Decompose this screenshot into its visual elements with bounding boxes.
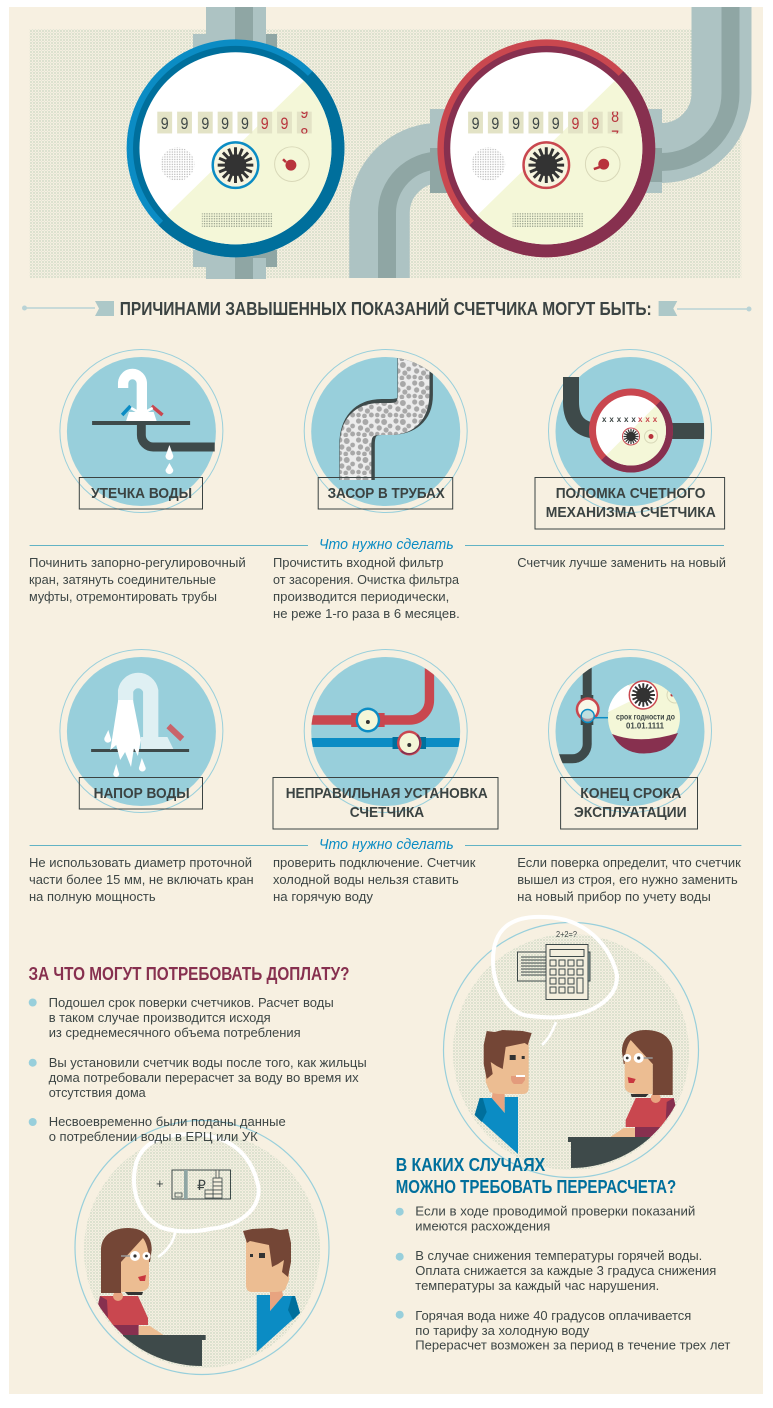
pipe: right curved pipe of red meter <box>640 7 730 193</box>
small meter with magnifier <box>576 695 609 725</box>
list: surcharge reasons: Вы установили счетчик воды после того, как жильцы <box>49 1055 367 1070</box>
meter digits: 9 <box>532 114 540 133</box>
list: recalculation cases: по тарифу за холодную воду <box>415 1323 590 1338</box>
list: recalculation cases: температуры за каждый час нарушения. <box>415 1278 659 1293</box>
subheading: what to do, row one: Что нужно сделать <box>319 536 454 553</box>
central dial <box>524 142 569 188</box>
formula: 2+2=? <box>556 930 577 939</box>
text block: pressure advice: Не использовать диаметр проточной <box>29 855 252 870</box>
panel: broken meter icon: xxx <box>638 415 660 424</box>
meter digits: 8 <box>611 107 619 126</box>
label: broken mechanism: МЕХАНИЗМА СЧЕТЧИКА <box>546 504 716 521</box>
small blue meter <box>351 708 385 732</box>
heading: recalculation: В КАКИХ СЛУЧАЯХ <box>396 1155 545 1175</box>
illustration: surcharge conversation <box>75 1120 329 1374</box>
speech bubble <box>134 1134 259 1257</box>
meter digits <box>157 112 312 134</box>
meter digits: 9 <box>241 114 249 133</box>
heading: surcharge: ЗА ЧТО МОГУТ ПОТРЕБОВАТЬ ДОПЛАТУ? <box>28 964 350 984</box>
list: recalculation cases: Если в ходе проводимой проверки показаний <box>415 1204 695 1219</box>
red meter <box>437 39 655 257</box>
text block: expiry advice <box>517 855 741 904</box>
text block: clog advice: от засорения. Очистка фильтра <box>273 572 460 587</box>
speech bubble <box>493 917 617 1045</box>
text block: leak advice <box>29 555 246 604</box>
label: end of service life: КОНЕЦ СРОКА <box>580 785 681 802</box>
text block: broken meter advice: Счетчик лучше заменить на новый <box>517 555 726 570</box>
woman and desk, left panel <box>98 1228 206 1372</box>
heading: recalculation <box>396 1155 676 1197</box>
receipt with ruble coins: + <box>156 1176 164 1191</box>
section heading with ribbons: ПРИЧИНАМИ ЗАВЫШЕННЫХ ПОКАЗАНИЙ СЧЕТЧИКА МОГУТ БЫТЬ: <box>120 298 652 319</box>
meter digits: 9 <box>261 114 269 133</box>
dotted plate <box>513 213 583 228</box>
list: recalculation cases: Оплата снижается за каждые 3 градуса снижения <box>415 1263 716 1278</box>
meter digits: 9 <box>201 114 209 133</box>
text block: clog advice: Прочистить входной фильтр <box>273 555 443 570</box>
text block: installation advice: холодной воды нельзя ставить <box>273 872 459 887</box>
list: surcharge reasons <box>29 995 367 1144</box>
meter digits: 9 <box>472 114 479 133</box>
text block: pressure advice: части более 15 мм, не включать кран <box>29 872 254 887</box>
receipt with ruble coins <box>156 1170 230 1199</box>
dotted backdrop <box>30 29 741 278</box>
text block: expiry advice: вышел из строя, его нужно заменить <box>517 872 738 887</box>
list: recalculation cases <box>396 1204 730 1352</box>
calculator and document <box>518 944 590 1000</box>
panel: clogged pipe icon <box>304 350 467 512</box>
magnified meter detail: 01.01.1111 <box>626 720 664 730</box>
text block: leak advice: муфты, отремонтировать трубы <box>29 589 217 604</box>
label: water pressure: НАПОР ВОДЫ <box>94 785 190 802</box>
panel: end of service life icon <box>548 650 712 812</box>
label: water pressure <box>79 778 202 809</box>
hero: water meters <box>30 7 741 279</box>
text block: expiry advice: на новый прибор по учету воды <box>517 889 711 904</box>
text block: clog advice: производится периодически, <box>273 589 449 604</box>
meter digits: 9 <box>572 114 579 133</box>
label: broken mechanism <box>535 478 725 529</box>
list: surcharge reasons: о потреблении воды в ЕРЦ или УК <box>49 1129 258 1144</box>
pipe: top and bottom of blue meter <box>193 7 277 279</box>
dotted plate <box>202 213 272 228</box>
panel: water leak icon <box>60 350 223 512</box>
gauge <box>275 147 309 181</box>
label: end of service life: ЭКСПЛУАТАЦИИ <box>574 804 687 821</box>
list: surcharge reasons: в таком случае производится исходя <box>49 1010 271 1025</box>
list: surcharge reasons: Несвоевременно были поданы данные <box>49 1114 286 1129</box>
dotted speaker <box>161 147 194 181</box>
meter digits: 8 <box>300 124 308 143</box>
list: surcharge reasons: из среднемесячного объема потребления <box>49 1025 301 1040</box>
woman and desk, right panel <box>568 1030 676 1170</box>
meter digits: 9 <box>221 114 229 133</box>
list: surcharge reasons: Подошел срок поверки счетчиков. Расчет воды <box>49 995 334 1010</box>
small red meter <box>393 730 426 756</box>
panel: broken meter icon <box>548 350 712 512</box>
heading: recalculation: МОЖНО ТРЕБОВАТЬ ПЕРЕРАСЧЕТА? <box>396 1177 676 1197</box>
text block: leak advice: кран, затянуть соединительные <box>29 572 216 587</box>
subheading: what to do, row two: Что нужно сделать <box>319 836 454 853</box>
text block: pressure advice: на полную мощность <box>29 889 156 904</box>
text block: installation advice: на горячую воду <box>273 889 373 904</box>
text block: pressure advice <box>29 855 254 904</box>
panel: wrong installation icon <box>304 650 467 812</box>
meter digits: 9 <box>281 114 288 133</box>
text block: clog advice: не реже 1-го раза в 6 месяцев. <box>273 606 460 621</box>
dotted speaker <box>472 147 505 181</box>
pipe: left curved pipe of red meter <box>380 109 455 278</box>
man, right panel <box>475 1030 532 1154</box>
panel: broken meter icon: xxxxx <box>602 415 639 424</box>
meter digits: 9 <box>491 114 499 133</box>
list: surcharge reasons: отсутствия дома <box>49 1085 146 1100</box>
meter digits: 9 <box>181 114 188 133</box>
label: wrong installation <box>273 778 498 829</box>
gauge <box>585 147 620 181</box>
label: clogged pipes: ЗАСОР В ТРУБАХ <box>328 485 445 502</box>
label: water leak: УТЕЧКА ВОДЫ <box>91 485 192 502</box>
meter digits: 9 <box>591 114 599 133</box>
label: clogged pipes <box>318 478 453 509</box>
text block: leak advice: Починить запорно-регулировочный <box>29 555 246 570</box>
magnified meter detail: срок годности до <box>616 711 675 721</box>
meter digits: 9 <box>552 114 560 133</box>
text block: expiry advice: Если поверка определит, что счетчик <box>517 855 741 870</box>
illustration: recalculation conversation <box>444 917 698 1178</box>
list: recalculation cases: В случае снижения температуры горячей воды. <box>415 1248 702 1263</box>
text block: clog advice <box>273 555 460 621</box>
label: end of service life <box>561 778 698 829</box>
magnified meter detail <box>608 681 683 754</box>
meter digits: 7 <box>611 127 619 146</box>
text block: installation advice: проверить подключение. Счетчик <box>273 855 476 870</box>
label: wrong installation: СЧЕТЧИКА <box>350 804 424 821</box>
meter digits: 9 <box>161 114 169 133</box>
man, left panel <box>243 1228 300 1352</box>
meter digits: 9 <box>512 114 520 133</box>
list: surcharge reasons: дома потребовали перерасчет за воду во время их <box>49 1070 359 1085</box>
label: broken mechanism: ПОЛОМКА СЧЕТНОГО <box>556 485 706 502</box>
panel: water pressure icon <box>60 650 223 812</box>
blue meter <box>127 39 344 257</box>
list: recalculation cases: имеются расхождения <box>415 1219 550 1234</box>
label: wrong installation: НЕПРАВИЛЬНАЯ УСТАНОВКА <box>286 785 488 802</box>
receipt with ruble coins: ₽ <box>197 1177 206 1193</box>
label: water leak <box>79 478 202 509</box>
list: recalculation cases: Перерасчет возможен за период в течение трех лет <box>415 1338 730 1352</box>
list: recalculation cases: Горячая вода ниже 40 градусов оплачивается <box>415 1308 691 1323</box>
text block: installation advice <box>273 855 476 904</box>
meter digits: 9 <box>300 103 308 122</box>
central dial <box>213 142 258 188</box>
meter digits <box>468 112 622 134</box>
